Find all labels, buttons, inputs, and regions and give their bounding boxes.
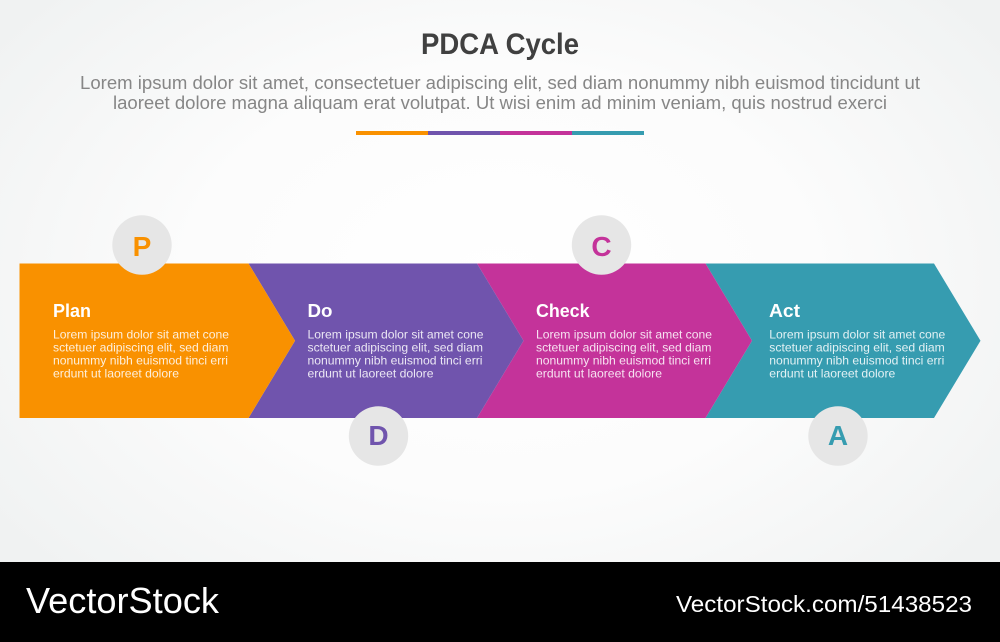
- segment: check: sctetuer adipiscing elit, sed diam: [536, 342, 712, 354]
- badge: C: [572, 215, 631, 275]
- segment: do: erdunt ut laoreet dolore: [308, 368, 434, 380]
- badge: P: [112, 215, 172, 275]
- segment: do: Lorem ipsum dolor sit amet cone: [308, 328, 484, 342]
- badge: C: C: [591, 231, 612, 262]
- badge: P: P: [133, 231, 151, 262]
- segment: act: Act: [769, 300, 800, 321]
- segment: act: Lorem ipsum dolor sit amet cone: [769, 328, 945, 342]
- segment: plan: Plan: [53, 300, 91, 321]
- subtitle: laoreet dolore magna aliquam erat volutpat. Ut wisi enim ad minim veniam, quis nostrud exerci: [113, 92, 887, 113]
- segment: plan: [20, 264, 295, 418]
- segment: act: sctetuer adipiscing elit, sed diam: [769, 342, 945, 354]
- segment: plan: Lorem ipsum dolor sit amet cone: [53, 328, 229, 342]
- segment: act: erdunt ut laoreet dolore: [769, 368, 895, 380]
- segment: plan: erdunt ut laoreet dolore: [53, 368, 179, 380]
- segment: check: nonummy nibh euismod tinci erri: [536, 354, 711, 368]
- segment: act: [706, 264, 980, 418]
- footer id: VectorStock.com/51438523: [676, 591, 972, 617]
- subtitle: Lorem ipsum dolor sit amet, consectetuer adipiscing elit, sed diam nonummy nibh euismod tincidunt ut: [80, 72, 921, 93]
- segment: do: Do: [308, 300, 332, 321]
- segment: plan: sctetuer adipiscing elit, sed diam: [53, 342, 228, 354]
- segment: act: nonummy nibh euismod tinci erri: [769, 354, 944, 368]
- segment: do: nonummy nibh euismod tinci erri: [308, 354, 482, 368]
- segment: check: erdunt ut laoreet dolore: [536, 368, 662, 380]
- subtitle: [80, 72, 921, 113]
- segment: plan: nonummy nibh euismod tinci erri: [53, 354, 228, 368]
- segment: check: Lorem ipsum dolor sit amet cone: [536, 328, 712, 342]
- title: PDCA Cycle: [421, 28, 579, 61]
- PDCA arrow: [20, 264, 980, 418]
- badge: A: A: [828, 420, 848, 451]
- segment: check: [477, 264, 752, 418]
- segment: check: Check: [536, 300, 590, 321]
- badge: D: D: [368, 420, 389, 451]
- footer bar: [0, 562, 1000, 642]
- colour bar: [356, 131, 644, 135]
- badge: D: [349, 406, 408, 466]
- header: [80, 28, 921, 135]
- segment: do: sctetuer adipiscing elit, sed diam: [308, 342, 483, 354]
- segment: do: [248, 264, 524, 418]
- badge: A: [808, 406, 868, 466]
- footer logo: VectorStock: [26, 580, 220, 621]
